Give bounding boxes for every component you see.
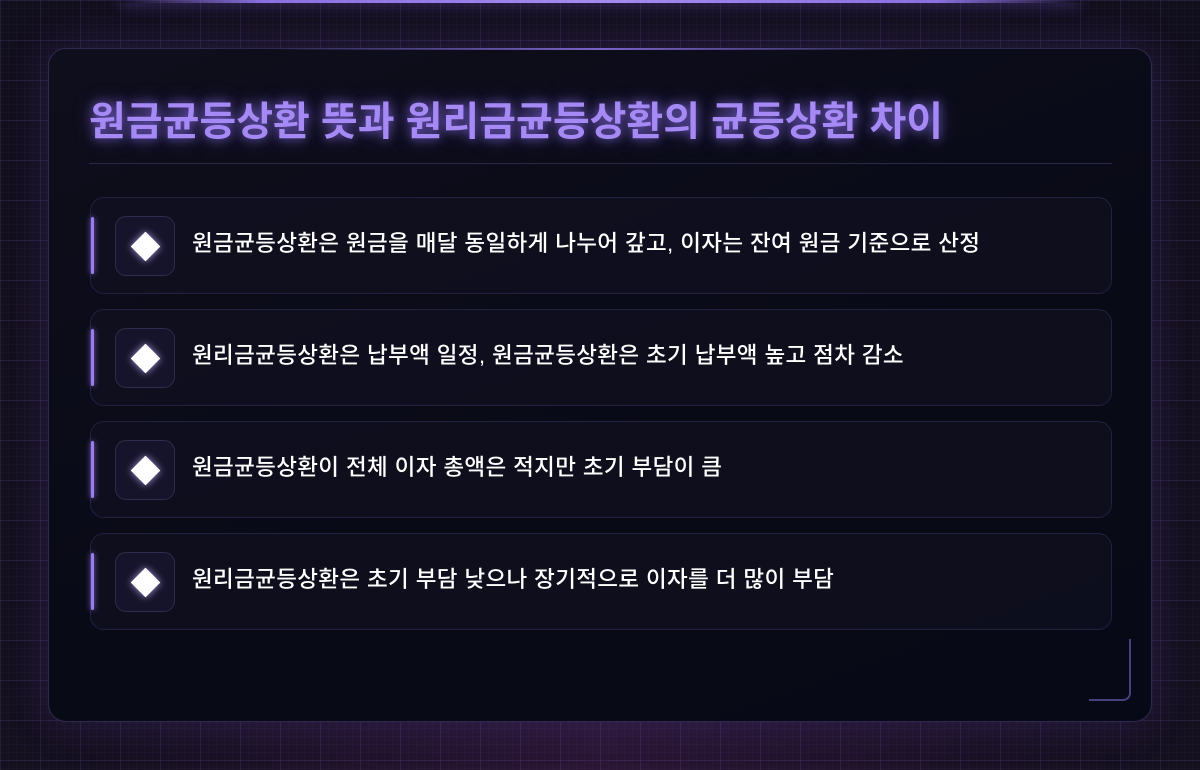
title: 원금균등상환 뜻과 원리금균등상환의 균등상환 차이 <box>89 100 943 144</box>
icon: diamond <box>115 552 175 612</box>
icon: diamond <box>115 440 175 500</box>
corner accent <box>1089 639 1131 701</box>
item 4 <box>90 533 1112 630</box>
item 3 <box>90 421 1112 518</box>
item 1 <box>90 197 1112 294</box>
text 3: 원금균등상환이 전체 이자 총액은 적지만 초기 부담이 큼 <box>192 455 722 480</box>
item 2 <box>90 309 1112 406</box>
text 1: 원금균등상환은 원금을 매달 동일하게 나누어 갚고, 이자는 잔여 원금 기준으로 산정 <box>192 231 980 256</box>
icon: diamond <box>115 216 175 276</box>
text 4: 원리금균등상환은 초기 부담 낮으나 장기적으로 이자를 더 많이 부담 <box>192 567 834 592</box>
icon: diamond <box>115 328 175 388</box>
text 2: 원리금균등상환은 납부액 일정, 원금균등상환은 초기 납부액 높고 점차 감소 <box>192 343 904 368</box>
